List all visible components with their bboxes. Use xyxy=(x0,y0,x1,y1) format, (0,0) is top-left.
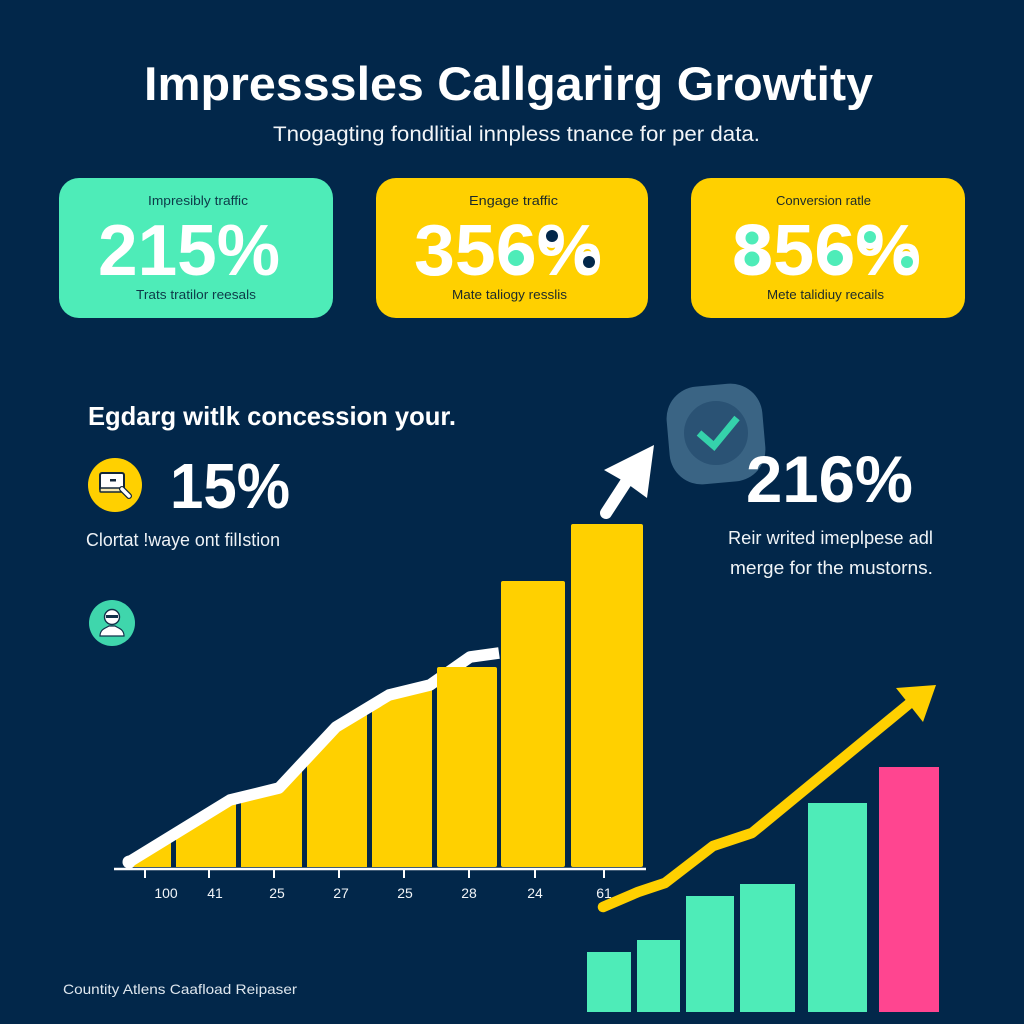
bar chart: teal and pink bars xyxy=(587,767,939,1012)
panel: traffic stat card: Impresibly traffic xyxy=(148,193,249,208)
arrow: yellow growth trend xyxy=(603,685,936,907)
panel: conversion stat card: Conversion ratle xyxy=(776,193,871,208)
axis labels: 41 xyxy=(207,885,223,901)
tall bars xyxy=(437,524,643,867)
stat: 216 percent: 216% xyxy=(746,442,913,516)
panel: engage stat card: Mate taliogy resslis xyxy=(452,287,568,302)
subtitle: Tnogagting fondlitial innpless tnance for per data. xyxy=(273,123,760,146)
axis labels: 61 xyxy=(596,885,612,901)
icon: person xyxy=(89,600,135,646)
axis labels: 100 xyxy=(154,885,178,901)
icon: check badge xyxy=(664,381,768,487)
arrow: white up-right xyxy=(604,445,654,513)
axis with ticks xyxy=(114,869,646,878)
axis labels: 25 xyxy=(269,885,285,901)
panel: conversion stat card xyxy=(691,178,965,318)
axis labels xyxy=(154,885,612,901)
panel: engage stat card: 356% xyxy=(414,211,602,291)
stat description xyxy=(728,528,933,578)
panel: engage stat card xyxy=(376,178,648,318)
stat description: merge for the mustorns. xyxy=(730,558,933,578)
bar chart: yellow bars with white trend line xyxy=(114,524,646,901)
panel: traffic stat card xyxy=(59,178,333,318)
panel: conversion stat card: 856% xyxy=(732,211,921,291)
axis labels: 27 xyxy=(333,885,349,901)
footer note: Countity Atlens Caafload Reipaser xyxy=(63,981,297,997)
axis labels: 28 xyxy=(461,885,477,901)
stat description: Reir writed imeplpese adl xyxy=(728,528,933,548)
icon: laptop with magnifier xyxy=(88,458,142,512)
panel: conversion stat card: Mete talidiuy recails xyxy=(767,287,885,302)
rising bars under the line xyxy=(125,680,432,867)
panel: traffic stat card: 215% xyxy=(98,211,280,291)
stat: 15 percent: 15% xyxy=(170,450,290,522)
axis labels: 24 xyxy=(527,885,543,901)
title: Impresssles Callgarirg Growtity xyxy=(144,57,873,110)
stat caption: Clortat !waye ont filIstion xyxy=(86,530,280,550)
axis labels: 25 xyxy=(397,885,413,901)
white trend line xyxy=(122,653,499,868)
panel: engage stat card: Engage traffic xyxy=(469,193,559,208)
panel: traffic stat card: Trats tratilor reesals xyxy=(136,287,257,302)
section heading: Egdarg witlk concession your. xyxy=(88,401,456,431)
